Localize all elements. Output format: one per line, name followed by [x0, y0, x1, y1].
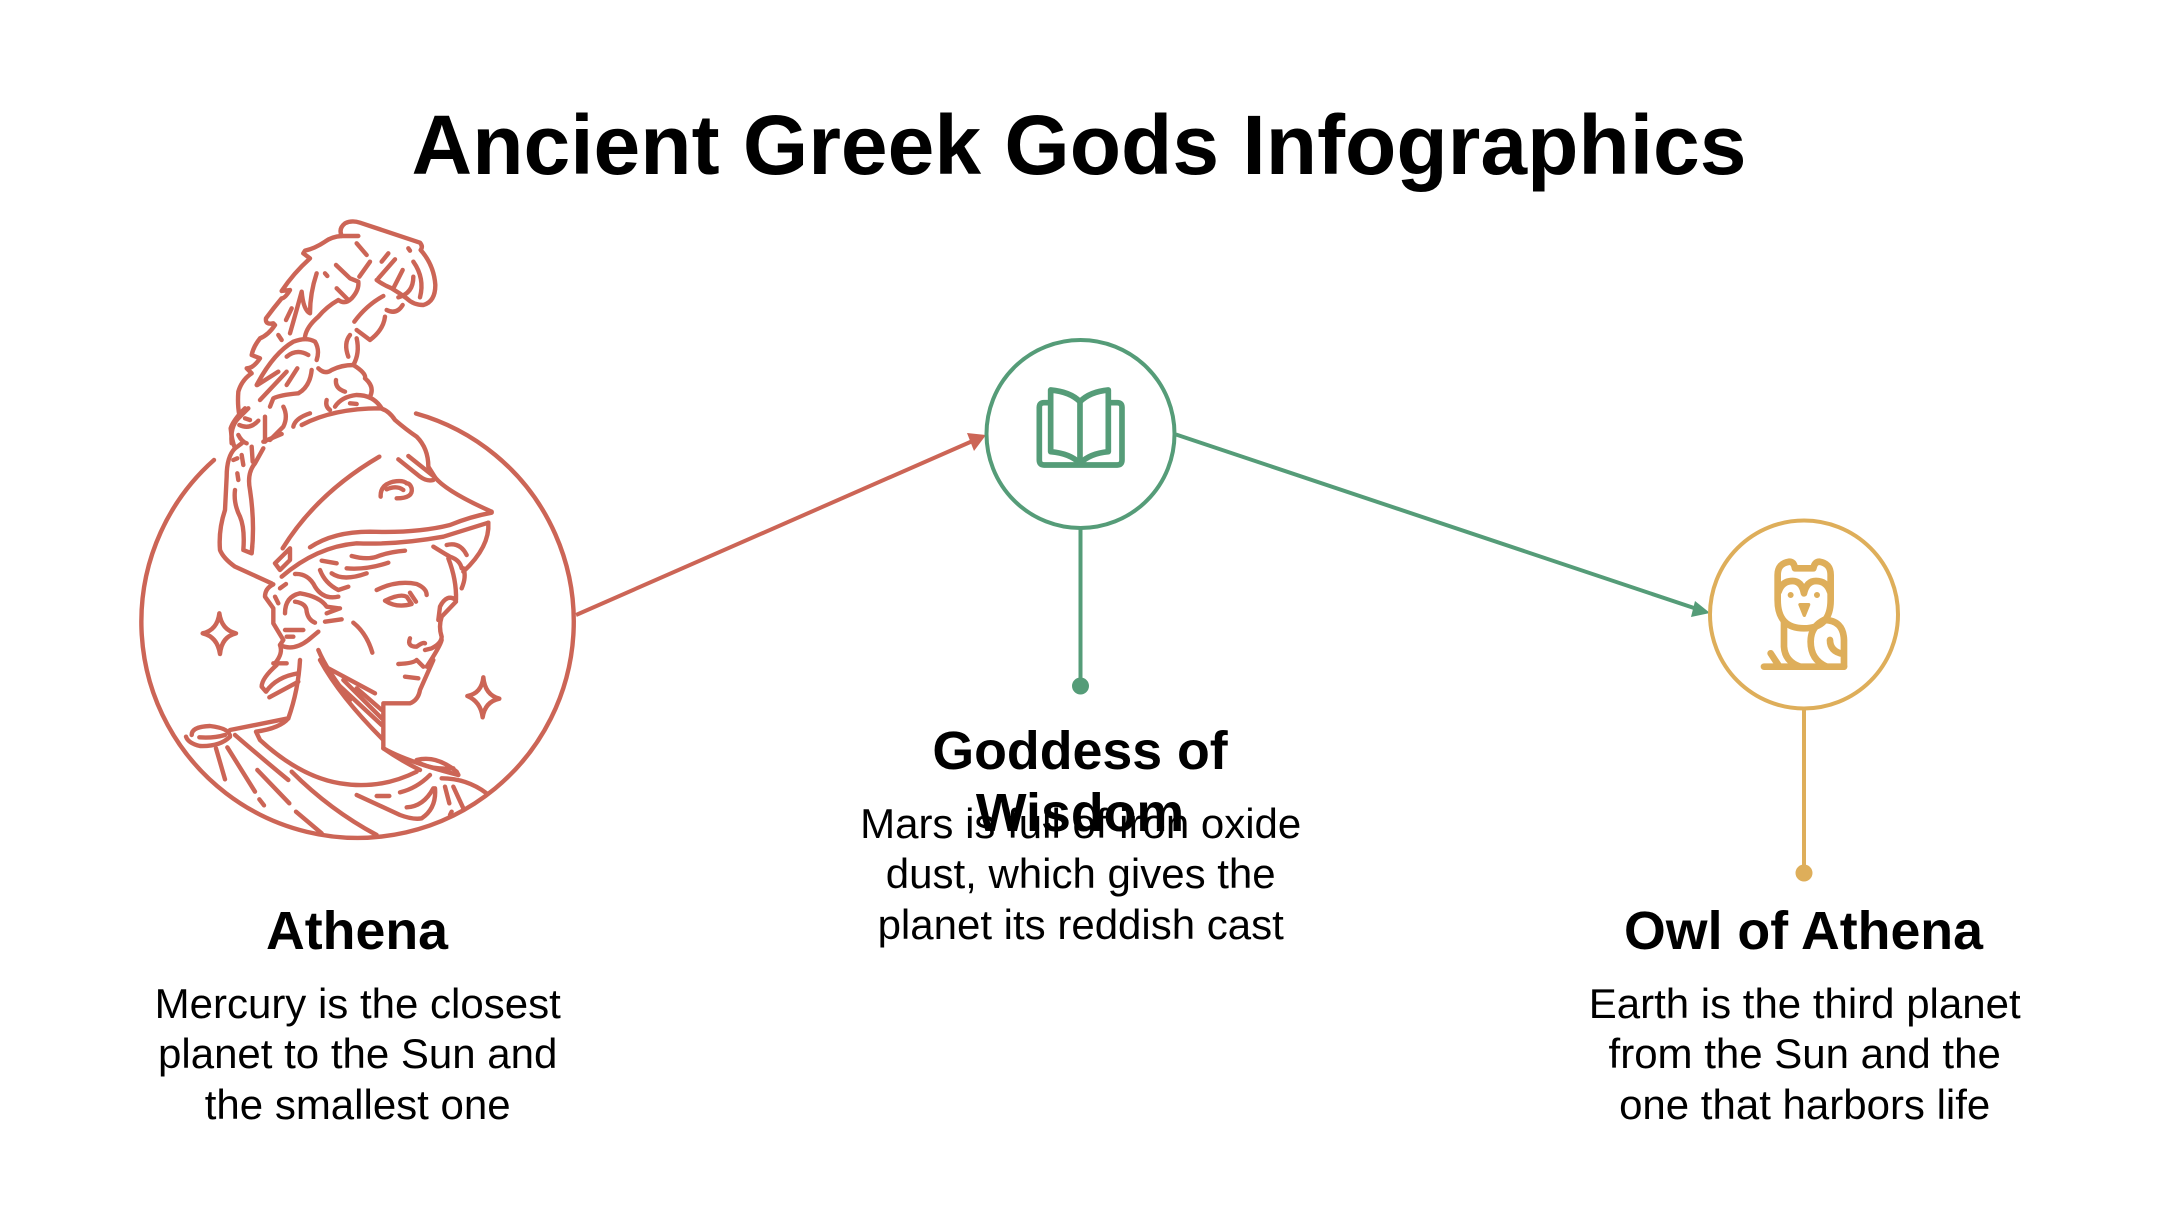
heading: Goddess of Wisdom: [932, 721, 1228, 843]
heading: Goddess of Wisdom: Goddess of: [932, 721, 1228, 781]
text: Owl of Athena description: one that harbors life: [1619, 1081, 1990, 1128]
heading: Goddess of Wisdom: Wisdom: [976, 783, 1184, 843]
arrow: wisdom to owl: [1176, 434, 1710, 617]
text: Athena description: planet to the Sun and: [158, 1030, 557, 1077]
text: Goddess of Wisdom description: Mars is full of iron oxide: [860, 800, 1301, 846]
text: Goddess of Wisdom description: dust, which gives the: [886, 850, 1276, 897]
text: Athena description: [155, 980, 561, 1128]
text: Goddess of Wisdom description: [860, 800, 1301, 948]
title: Ancient Greek Gods Infographics: [412, 98, 1746, 192]
plume line art: [231, 221, 435, 443]
neck, shoulder and drapery line art: [186, 660, 499, 835]
text: Owl of Athena description: [1589, 980, 2021, 1128]
text: Owl of Athena description: Earth is the third planet: [1589, 980, 2021, 1026]
text: Athena description: the smallest one: [205, 1081, 511, 1128]
text: Owl of Athena description: from the Sun and the: [1609, 1030, 2001, 1077]
text: Goddess of Wisdom description: planet its reddish cast: [878, 901, 1284, 948]
connector: owl node to label: [1796, 708, 1812, 882]
medallion ring: [141, 414, 574, 838]
connector: wisdom node to label: [1072, 528, 1089, 694]
helmet and face line art: [203, 408, 492, 700]
arrow: Athena to wisdom: [576, 433, 986, 615]
node: book icon in green circle: [986, 340, 1174, 528]
text: Athena description: Mercury is the closest: [155, 980, 561, 1026]
illustration: Athena helmeted head in circle: [141, 221, 574, 838]
node: owl icon in yellow circle: [1710, 520, 1898, 708]
heading: Owl of Athena: Owl of Athena: [1624, 901, 1983, 961]
heading: Athena: Athena: [266, 901, 448, 961]
